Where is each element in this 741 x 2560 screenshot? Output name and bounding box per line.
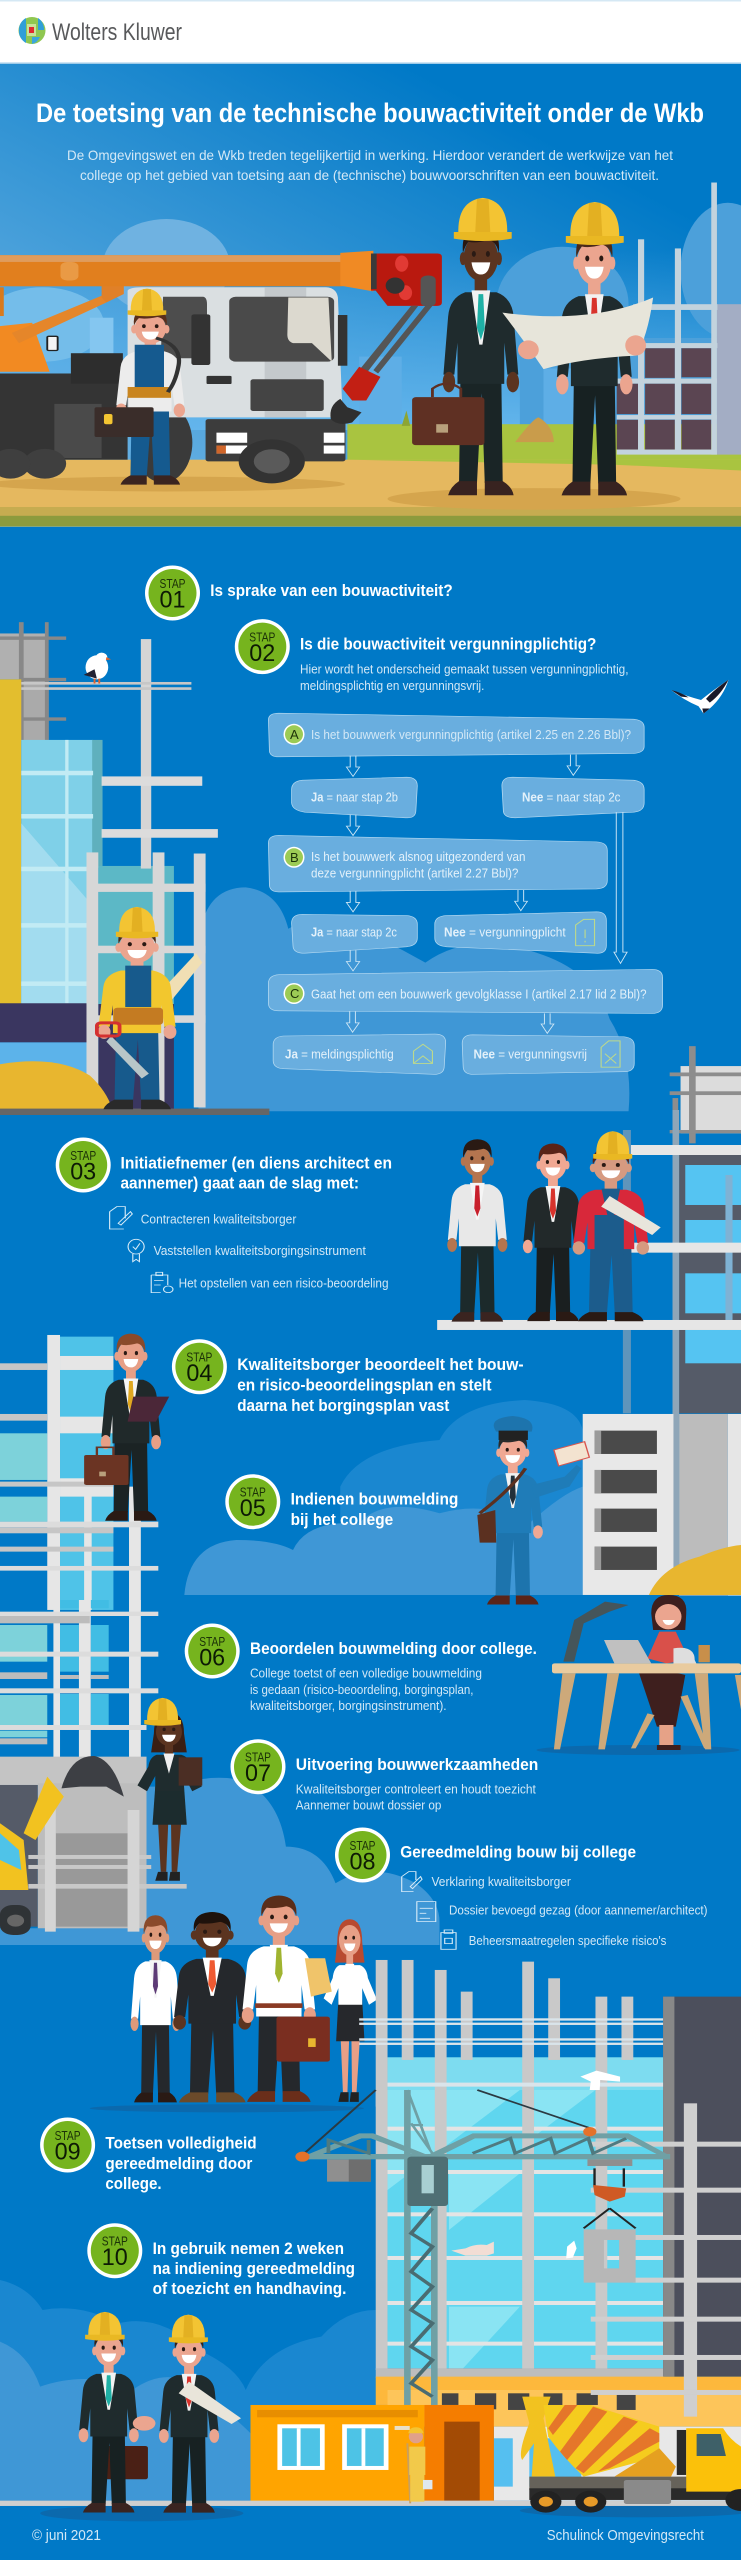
step 3 text: aannemer) gaat aan de slag met:	[120, 1174, 359, 1192]
step 3 badge: STAP	[70, 1148, 96, 1163]
step 8 text: Beheersmaatregelen specifieke risico's	[469, 1933, 667, 1948]
step 1 badge: 01	[160, 586, 186, 614]
step 2 heading and text: Is die bouwactiviteit vergunningplichtig?	[300, 635, 596, 653]
businessman with briefcase	[412, 198, 519, 495]
crane truck	[0, 281, 347, 483]
flow arrows	[346, 755, 627, 1033]
step B question: B	[290, 850, 299, 865]
step 3 text: Vaststellen kwaliteitsborgingsinstrument	[154, 1243, 366, 1258]
step 3 badge: 03	[70, 1158, 96, 1185]
step 2 badge: 02	[249, 640, 275, 667]
logo: Wolters Kluwer: Wolters Kluwer	[52, 19, 182, 46]
seagull standing	[84, 653, 111, 683]
step B question: Is het bouwwerk alsnog uitgezonderd van	[311, 849, 526, 864]
seagull flying	[671, 680, 728, 714]
step 8 text: Verklaring kwaliteitsborger	[432, 1874, 572, 1889]
cloud behind flow chart	[198, 887, 629, 1111]
step 4 text	[237, 1356, 524, 1415]
step 9 badge: STAP	[55, 2128, 81, 2143]
step 10 text: In gebruik nemen 2 weken	[153, 2240, 344, 2258]
step 6 text: College toetst of een volledige bouwmelding	[250, 1665, 482, 1680]
step 6 text: Beoordelen bouwmelding door college.	[250, 1640, 537, 1658]
dark tower with scaffold	[376, 2090, 741, 2501]
step 4 text: en risico-beoordelingsplan en stelt	[237, 1377, 492, 1395]
step 6 text: kwaliteitsborger, borgingsinstrument).	[250, 1698, 447, 1713]
answer Ja naar stap 2b: Ja = naar stap 2b	[311, 790, 398, 805]
worker with saw	[97, 907, 202, 1109]
step 9 text: gereedmelding door	[105, 2155, 253, 2173]
glass building top	[359, 1960, 741, 2107]
step 9 text: college.	[105, 2175, 162, 2193]
step 2 badge: STAP	[249, 630, 275, 645]
panel: steps 1 and 2 illustration	[0, 622, 741, 1120]
step 2 badge	[235, 619, 290, 674]
step 7 text: Uitvoering bouwwerkzaamheden	[296, 1756, 538, 1774]
list icons step 3	[110, 1207, 173, 1293]
header with logo	[0, 0, 741, 64]
answer Ja naar stap 2c: Ja = naar stap 2c	[311, 924, 397, 939]
tower crane	[295, 2090, 670, 2405]
step 7 text	[296, 1756, 538, 1812]
glass facade	[376, 2090, 664, 2378]
step 5 text: Indienen bouwmelding	[291, 1490, 458, 1508]
step 4 text: daarna het borgingsplan vast	[237, 1397, 450, 1415]
step 6 text	[250, 1640, 537, 1713]
ground	[0, 411, 741, 527]
seagull building	[580, 2071, 620, 2100]
step 10 text: of toezicht en handhaving.	[153, 2280, 346, 2298]
worker with tool box	[95, 289, 185, 485]
step 1 badge	[145, 566, 200, 620]
building left	[0, 622, 174, 1111]
intro text: De Omgevingswet en de Wkb treden tegelijkertijd in werking. Hierdoor verandert de werkwijze van het	[67, 147, 673, 163]
step 4 badge: 04	[186, 1360, 212, 1387]
step 3 text	[120, 1154, 392, 1291]
ground shadow	[40, 2104, 741, 2521]
ground line	[0, 1109, 269, 1115]
intro text	[67, 147, 673, 183]
step A question: A	[290, 727, 299, 742]
site office	[250, 2405, 494, 2502]
scaffold	[21, 639, 218, 1109]
sand pile right	[649, 1545, 741, 1595]
step 6 badge	[185, 1624, 240, 1678]
step A question	[284, 724, 631, 745]
concrete mixer truck	[521, 2397, 741, 2513]
panel: hero illustration	[0, 64, 741, 527]
flow chart	[268, 713, 663, 1074]
answer Nee naar stap 2c: Nee = naar stap 2c	[522, 790, 621, 805]
clouds and skyline	[0, 203, 741, 439]
logo: Wolters Kluwer	[18, 17, 182, 46]
step C question: C	[290, 986, 299, 1001]
step C question	[284, 983, 646, 1004]
step C question: Gaat het om een bouwwerk gevolgklasse I (artikel 2.17 lid 2 Bbl)?	[311, 986, 646, 1001]
step 3 text: Initiatiefnemer (en diens architect en	[120, 1154, 392, 1172]
step 2 heading and text	[300, 635, 628, 693]
step 10 badge: STAP	[102, 2234, 128, 2249]
panel: steps 6 to 9 illustrations	[0, 1595, 741, 2107]
step 8 text	[400, 1844, 708, 1948]
cat	[451, 2242, 494, 2256]
three people on platform	[447, 1131, 661, 1322]
postman	[477, 1416, 589, 1605]
step 9 badge	[40, 2118, 95, 2172]
step B question	[284, 847, 526, 881]
high-rise right	[437, 1110, 741, 1595]
step 7 text: Aannemer bouwt dossier op	[296, 1797, 441, 1812]
step 3 text: Contracteren kwaliteitsborger	[141, 1211, 297, 1226]
step 8 text: Gereedmelding bouw bij college	[400, 1844, 636, 1862]
step 9 badge: 09	[55, 2138, 81, 2165]
footer: © juni 2021	[32, 2527, 101, 2544]
answer Ja meldingsplichtig: Ja = meldingsplichtig	[285, 1047, 394, 1062]
clouds bottom left	[0, 2280, 376, 2501]
answer Nee vergunningsvrij: Nee = vergunningsvrij	[474, 1047, 587, 1062]
step 7 text: Kwaliteitsborger controleert en houdt toezicht	[296, 1781, 536, 1796]
sand pile	[515, 417, 554, 442]
step 2 heading and text: meldingsplichtig en vergunningsvrij.	[300, 678, 484, 693]
excavator	[0, 1756, 124, 1935]
woman at desk	[536, 1595, 741, 1755]
block with windows	[583, 1414, 741, 1596]
step 8 text: Dossier bevoegd gezag (door aannemer/architect)	[449, 1902, 708, 1917]
step 2 heading and text: Hier wordt het onderscheid gemaakt tussen vergunningplichtig,	[300, 662, 628, 677]
building block with excavator	[0, 1783, 187, 1932]
step 1 badge: STAP	[160, 576, 186, 591]
step 6 text: is gedaan (risico-beoordeling, borgingsplan,	[250, 1682, 474, 1697]
two businessmen shaking hands	[79, 2312, 241, 2513]
cloud behind people	[0, 1778, 440, 1945]
step 7 badge: 07	[245, 1760, 271, 1787]
scaffold right	[670, 1046, 741, 1120]
businessman with blueprint	[502, 202, 653, 495]
step 7 badge	[230, 1739, 286, 1794]
panel: steps 3 to 5 illustrations	[0, 1110, 741, 1610]
step B question: deze vergunningplicht (artikel 2.27 Bbl)?	[311, 866, 518, 881]
crane hook with load	[584, 2159, 636, 2283]
scaffold left	[0, 1335, 158, 1610]
flow icons	[414, 919, 620, 1067]
step 8 badge	[335, 1828, 390, 1882]
step 8 badge: 08	[350, 1848, 376, 1875]
step 10 badge: 10	[102, 2244, 128, 2271]
step 1 heading: Is sprake van een bouwactiviteit?	[210, 582, 453, 600]
painter	[395, 2426, 432, 2503]
step 5 badge: 05	[240, 1495, 266, 1522]
step 3 text: Het opstellen van een risico-beoordeling	[179, 1276, 388, 1291]
step 8 badge: STAP	[350, 1838, 376, 1853]
step 4 badge	[172, 1339, 227, 1394]
scaffold continued	[0, 1600, 158, 1785]
step 9 text: Toetsen volledigheid	[105, 2134, 257, 2152]
panel: bottom construction scene	[0, 2090, 741, 2521]
step 5 text: bij het college	[291, 1511, 393, 1529]
ground strip	[0, 2501, 741, 2506]
clouds	[184, 1400, 583, 1595]
step A question: Is het bouwwerk vergunningplichtig (artikel 2.25 en 2.26 Bbl)?	[311, 727, 631, 742]
step 5 text	[291, 1490, 458, 1529]
step 10 text	[153, 2240, 355, 2298]
seagull on bar	[566, 2241, 577, 2258]
step 5 badge: STAP	[240, 1485, 266, 1500]
footer	[32, 2527, 705, 2544]
woman with helmet	[137, 1698, 202, 1881]
step 6 badge: 06	[199, 1644, 225, 1671]
list icons step 8	[402, 1872, 456, 1949]
group of four	[130, 1895, 377, 2102]
step 5 badge	[225, 1474, 280, 1529]
footer: Schulinck Omgevingsrecht	[547, 2527, 705, 2544]
step 7 badge: STAP	[245, 1750, 271, 1765]
step 10 badge	[87, 2223, 142, 2278]
intro text: college op het gebied van toetsing aan de (technische) bouwvoorschriften van een bouwactiviteit.	[80, 167, 659, 183]
step 9 text	[105, 2134, 257, 2193]
step 3 badge	[56, 1138, 111, 1192]
step 6 badge: STAP	[199, 1634, 225, 1649]
answer Nee vergunningplicht: Nee = vergunningplicht	[444, 924, 566, 939]
sand pile	[0, 1061, 112, 1109]
step 4 badge: STAP	[186, 1350, 212, 1365]
crane boom	[0, 251, 442, 424]
hero scene	[0, 183, 741, 527]
businessman with folder	[84, 1334, 169, 1521]
step 10 text: na indiening gereedmelding	[153, 2260, 355, 2278]
building under construction	[617, 183, 741, 455]
flow boxes	[268, 713, 663, 1074]
step 4 text: Kwaliteitsborger beoordeelt het bouw-	[237, 1356, 524, 1374]
